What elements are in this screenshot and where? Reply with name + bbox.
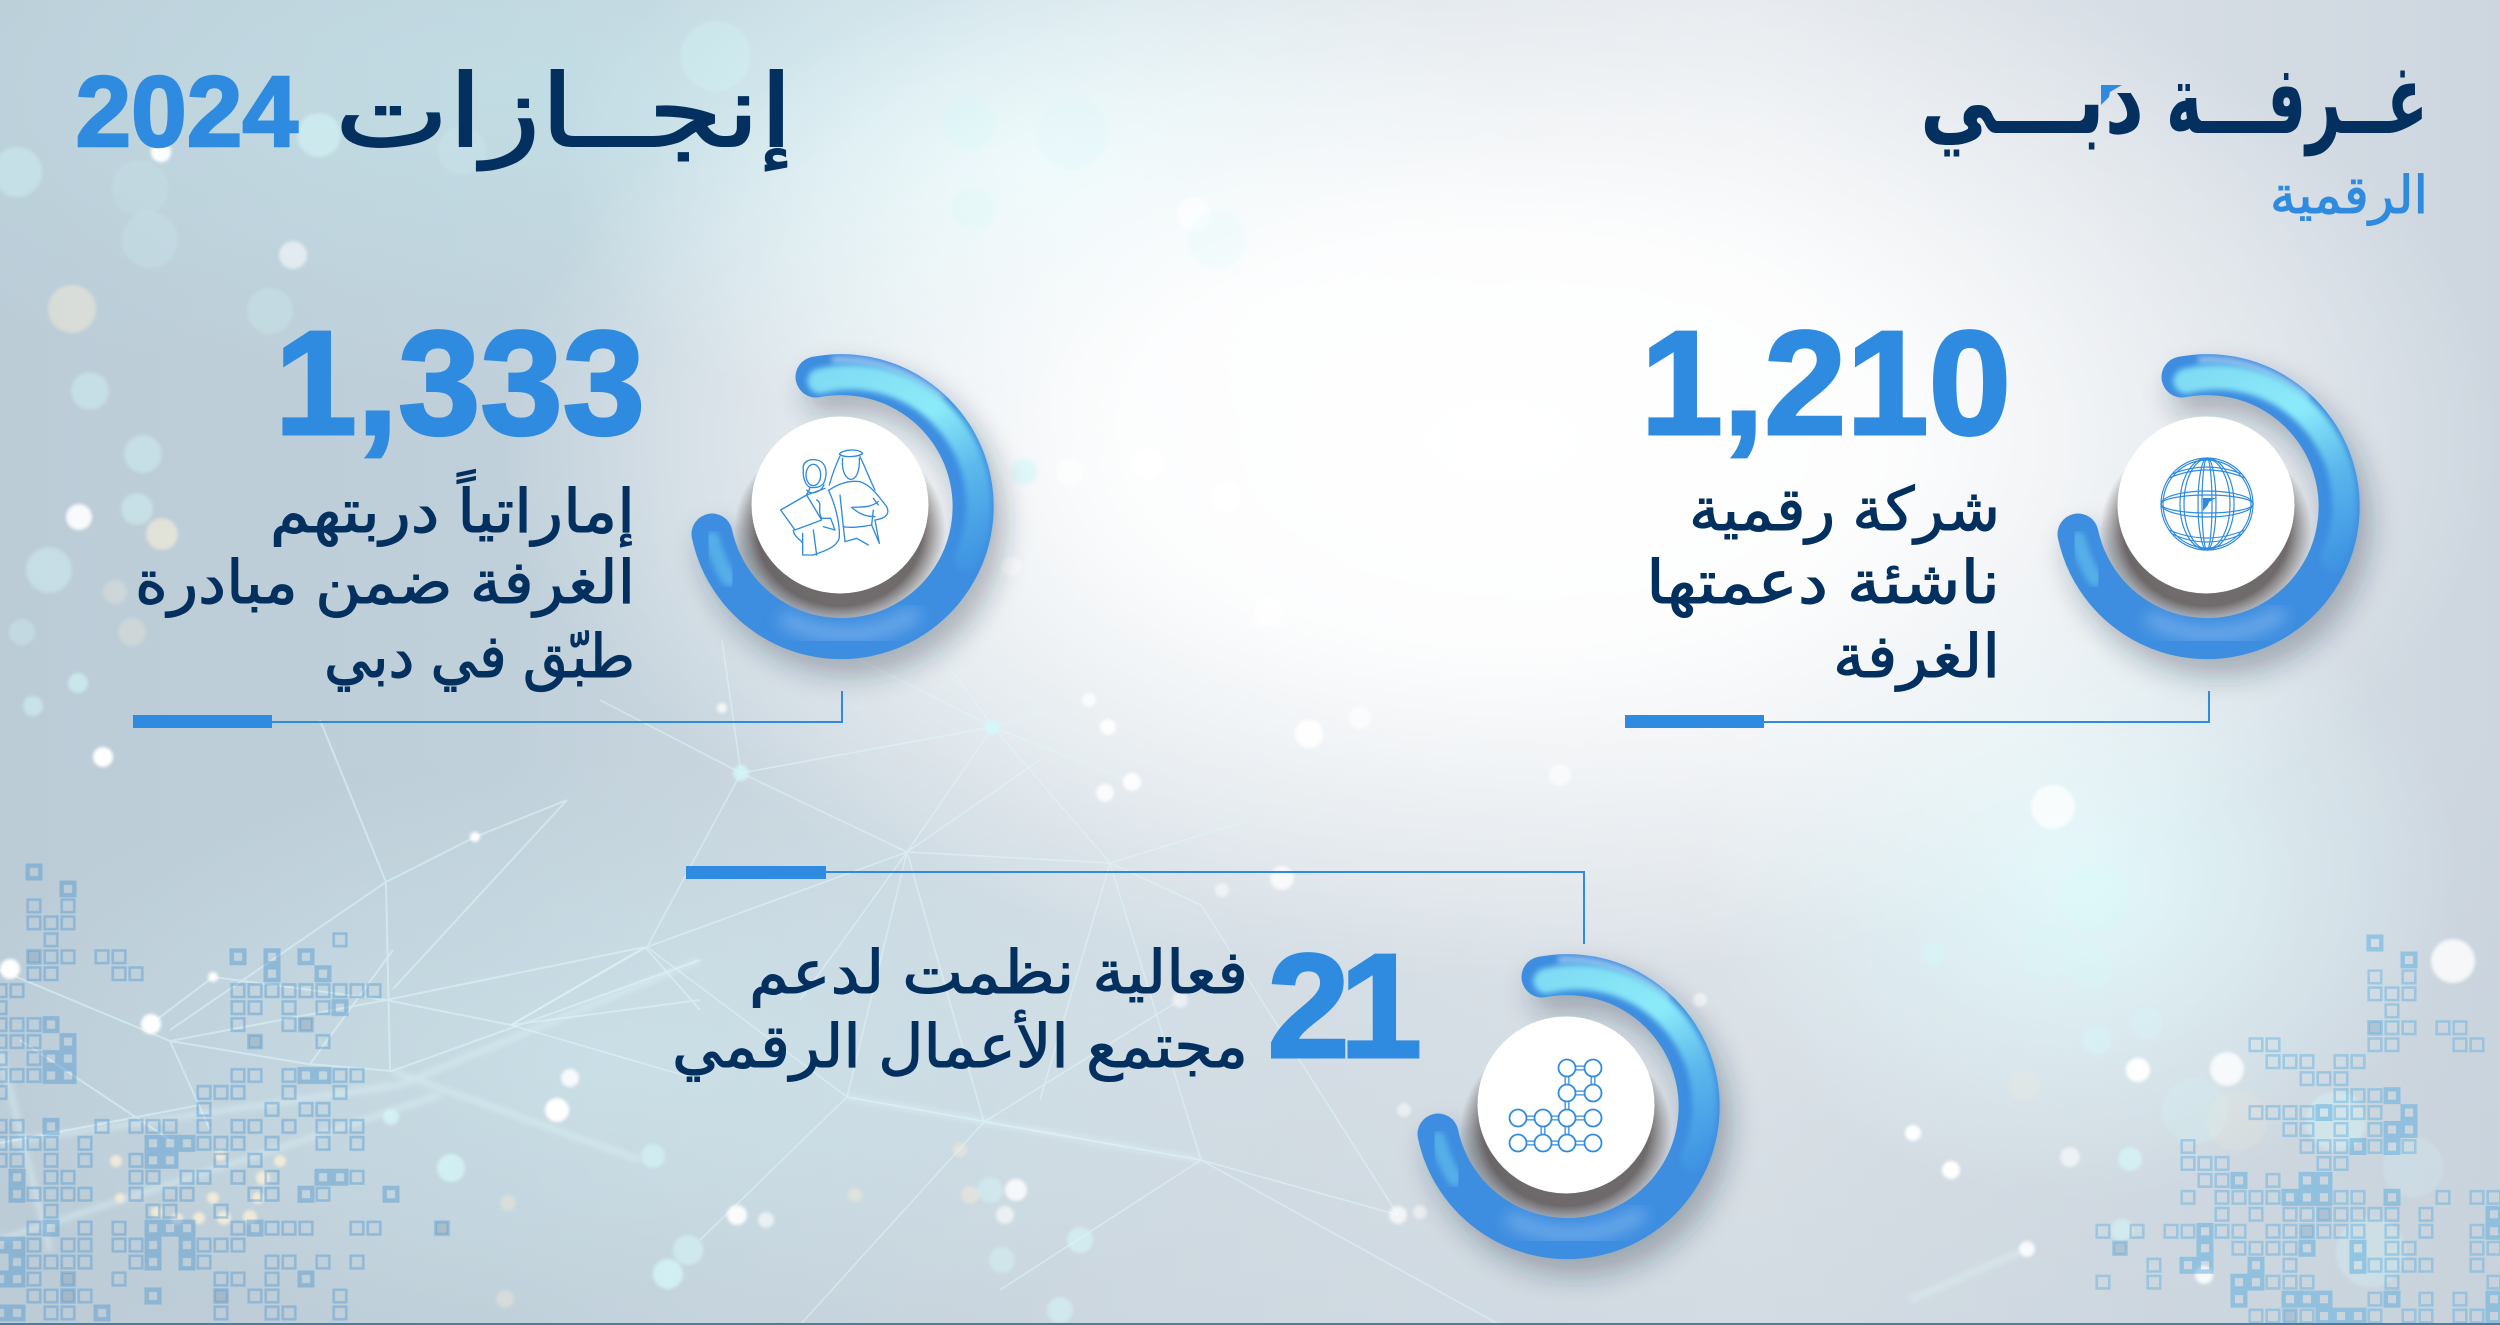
panel: startups supported	[1625, 301, 2349, 728]
logo word: dubai: دبـــي	[1920, 47, 2144, 157]
icon: globe	[2161, 458, 2253, 550]
connector	[1625, 691, 2209, 728]
description: إماراتياً دربتهم	[270, 469, 635, 547]
icon: flag mark	[2203, 498, 2216, 511]
description	[1646, 476, 2000, 692]
icon: connected nodes	[1510, 1060, 1602, 1152]
description: الغرفة ضمن مبادرة	[135, 549, 635, 618]
description: ناشئة دعمتها	[1646, 549, 2000, 618]
description: طبّق في دبي	[324, 623, 635, 692]
connector	[686, 866, 1584, 944]
icon: two people	[781, 450, 888, 555]
description: فعالية نظمت لدعم	[749, 939, 1248, 1008]
background network lines	[0, 640, 2027, 1325]
pixel squares: bottom left	[0, 866, 448, 1319]
pixel squares: bottom right	[2097, 937, 2500, 1322]
description	[672, 939, 1248, 1082]
panel: Emiratis trained	[133, 301, 983, 728]
logo accent	[2101, 85, 2122, 105]
description: الغرفة	[1833, 623, 2000, 692]
ring: Emiratis	[712, 360, 983, 655]
panel: events organised	[672, 866, 1709, 1255]
title year: 2024	[76, 56, 298, 168]
connector	[133, 691, 842, 728]
logo subtitle: digital: الرقمية	[2270, 167, 2428, 226]
description: شركة رقمية	[1689, 476, 2000, 545]
description	[135, 469, 635, 692]
bottom edge strip	[0, 1323, 2500, 1325]
number: 1,210	[1641, 301, 2011, 466]
description: مجتمع الأعمال الرقمي	[672, 1010, 1248, 1082]
ring: startups	[2078, 360, 2349, 655]
title	[76, 56, 793, 171]
logo: Dubai Chamber Digital	[1920, 47, 2428, 226]
number: 21	[1267, 924, 1419, 1089]
number: 1,333	[275, 301, 645, 466]
title text: achievements: إنجــازات	[335, 56, 793, 171]
ring: events	[1438, 960, 1709, 1255]
